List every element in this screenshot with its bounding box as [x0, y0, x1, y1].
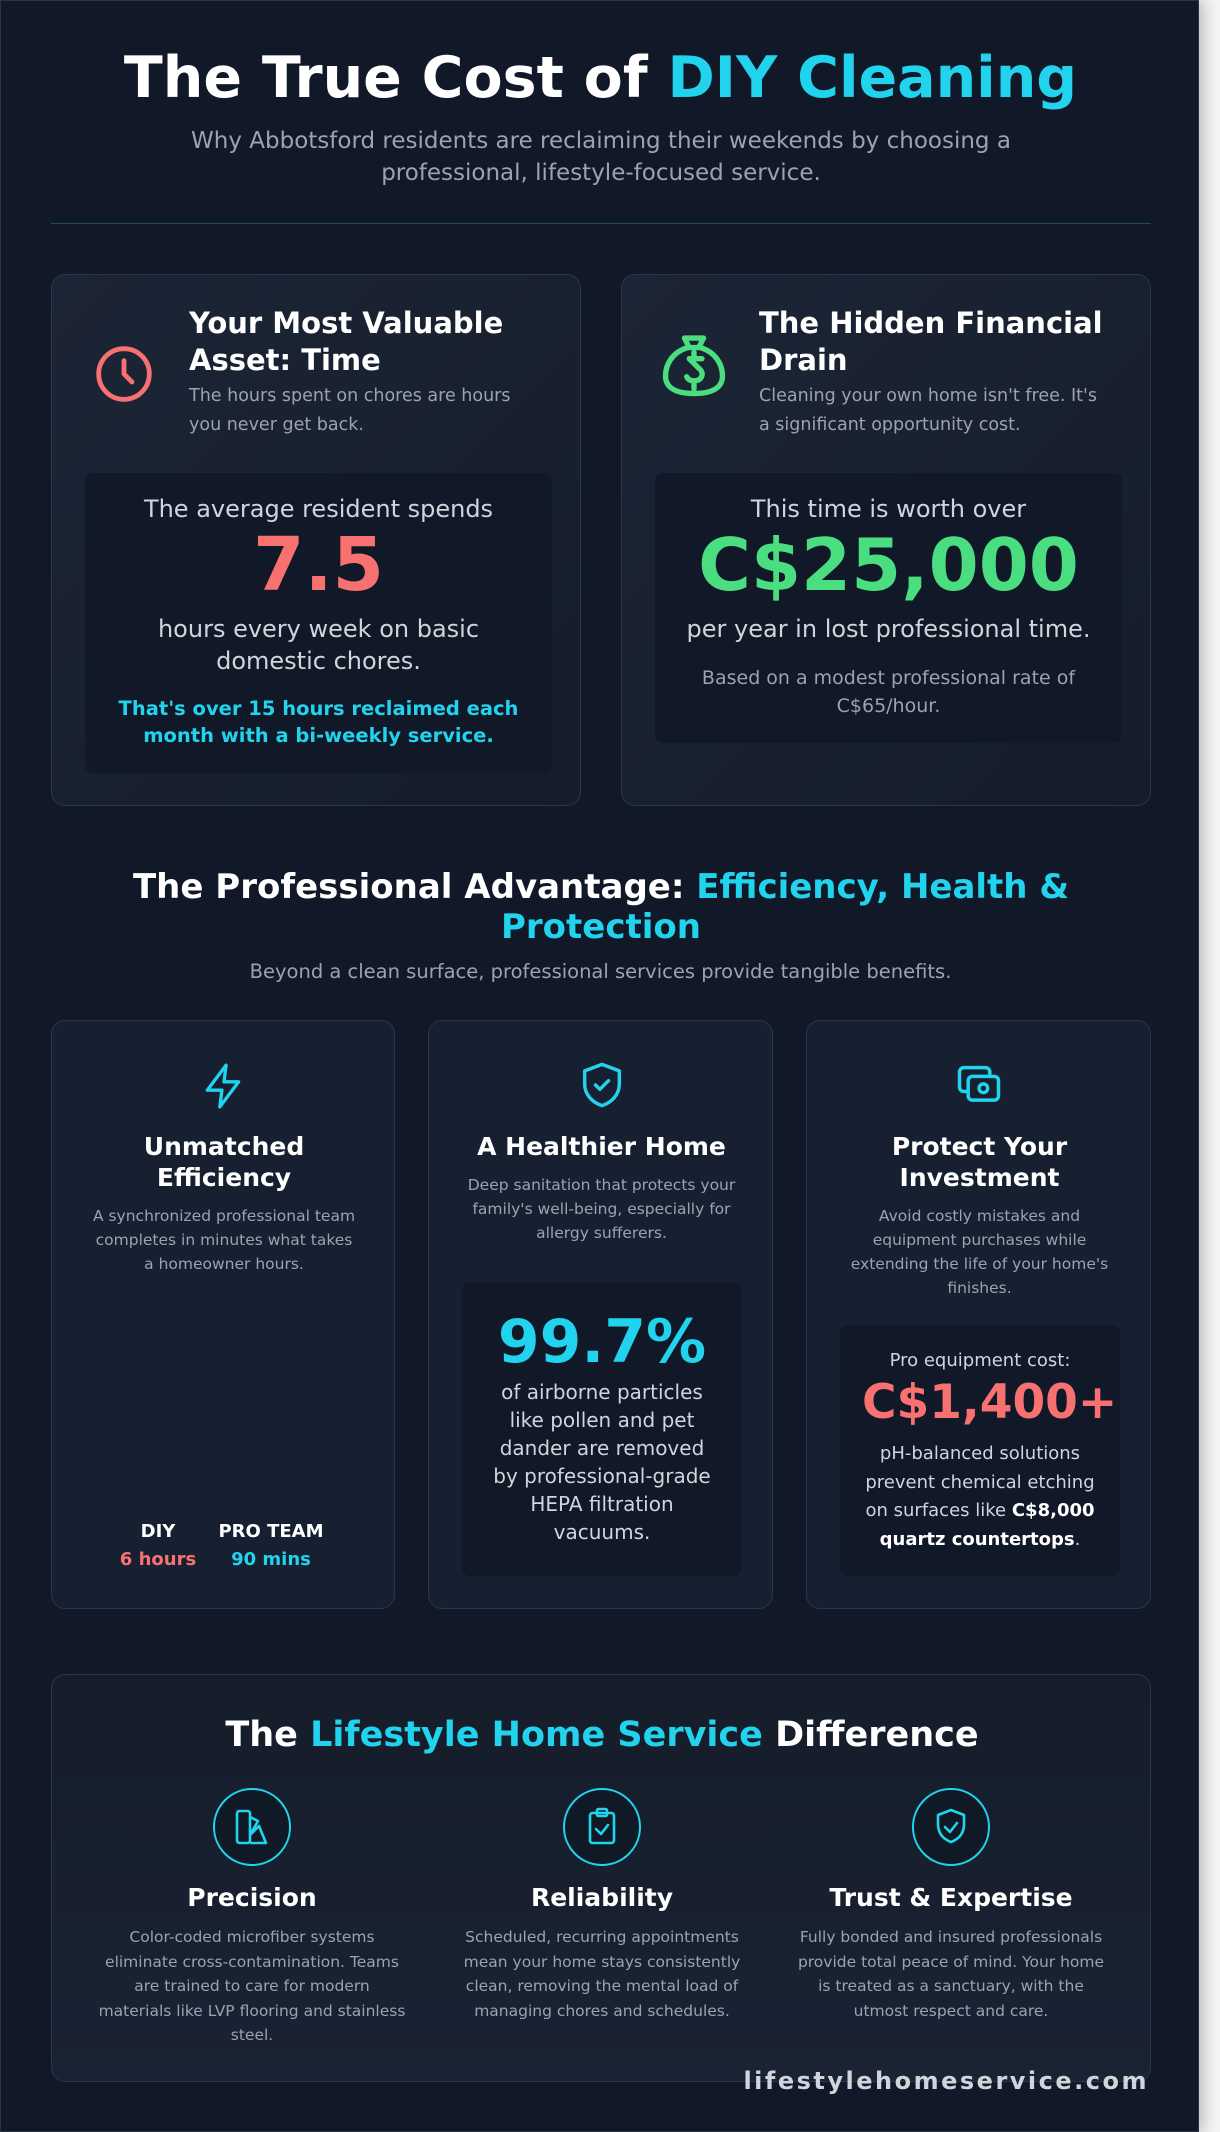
subtitle: advantage: Beyond a clean surface, professional services provide tangible benefits. [250, 960, 951, 983]
stat box: C$25,000: per year in lost professional time. [687, 615, 1090, 643]
icon: clipboard [563, 1788, 641, 1866]
text: efficiency desc: A synchronized professional team completes in minutes what takes a homeowner hours. [93, 1207, 355, 1273]
comparison: DIY vs pro: DIY [141, 1521, 175, 1542]
icon: cash [958, 1066, 1000, 1102]
panel: time [51, 274, 581, 806]
subtitle: Why Abbotsford residents are reclaiming their weekends by choosing a professional, lifestyle-focused service. [191, 128, 1011, 186]
stat box: 99.7%: 99.7% [498, 1307, 706, 1377]
comparison: DIY vs pro: 6 hours [120, 1549, 196, 1570]
heading: precision: Precision [187, 1883, 317, 1912]
stat box: 7.5 hours: 7.5 [253, 522, 384, 608]
footer: website: lifestylehomeservice.com [743, 2067, 1149, 2095]
panel: financial [621, 274, 1151, 806]
text: financial desc: Cleaning your own home isn't free. It's a significant opportunity cost. [759, 386, 1097, 435]
text: precision desc: Color-coded microfiber systems eliminate cross-contamination. Teams are trained to care for modern materials like LVP flooring and stainless steel. [99, 1928, 405, 2044]
stat box: C$1,400+: C$1,400+ [862, 1375, 1117, 1430]
column: reliability [464, 1788, 740, 2020]
heading: healthier: A Healthier Home [477, 1132, 726, 1161]
stat box: C$25,000: C$25,000 [698, 523, 1079, 607]
heading: protect: Protect Your Investment [892, 1132, 1067, 1192]
heading: trust: Trust & Expertise [829, 1883, 1073, 1912]
stat box: C$25,000: This time is worth over [751, 495, 1026, 523]
icon: clock [96, 346, 152, 402]
heading: difference: The Lifestyle Home Service Difference [225, 1715, 979, 1755]
heading: professional advantage: The Professional Advantage: Efficiency, Health & Protection [133, 867, 1069, 947]
stat box: C$1,400+: Pro equipment cost: [890, 1350, 1070, 1371]
stat box: 7.5 hours: That's over 15 hours reclaimed each month with a bi-weekly service. [119, 697, 518, 747]
comparison: DIY vs pro: 90 mins [231, 1549, 311, 1570]
heading: time: Your Most Valuable Asset: Time [189, 306, 503, 377]
stat box: 99.7% [462, 1282, 742, 1576]
column: precision [99, 1788, 405, 2044]
text: reliability desc: Scheduled, recurring appointments mean your home stays consistently clean, removing the mental load of managing chores and schedules. [464, 1928, 740, 2020]
panel: healthier home [428, 1020, 773, 1609]
stat box: C$1,400+ [840, 1325, 1120, 1576]
icon: lightning [206, 1064, 240, 1108]
stat box: 99.7%: of airborne particles like pollen and pet dander are removed by professional-grade HEPA filtration vacuums. [493, 1380, 711, 1544]
stat box: 7.5 hours: The average resident spends [144, 495, 493, 523]
stat box: C$25,000 [655, 473, 1122, 743]
stat box: C$1,400+: pH-balanced solutions prevent chemical etching on surfaces like C$8,000 quartz countertops. [865, 1443, 1095, 1550]
icon: money bag [662, 335, 726, 396]
text: healthier desc: Deep sanitation that protects your family's well-being, especially for allergy sufferers. [468, 1176, 735, 1242]
text: time desc: The hours spent on chores are hours you never get back. [189, 386, 510, 435]
stat box: C$25,000: Based on a modest professional rate of C$65/hour. [702, 667, 1075, 717]
column: trust [798, 1788, 1104, 2020]
text: protect desc: Avoid costly mistakes and equipment purchases while extending the life of your home's finishes. [851, 1207, 1108, 1297]
stat box: 7.5 hours: hours every week on basic domestic chores. [158, 615, 479, 675]
panel: efficiency [51, 1020, 395, 1609]
comparison: DIY vs pro: PRO TEAM [218, 1521, 324, 1542]
panel: protect investment [806, 1020, 1151, 1609]
panel: lifestyle difference [51, 1674, 1151, 2082]
text: trust desc: Fully bonded and insured professionals provide total peace of mind. Your home is treated as a sanctuary, with the utmost respect and care. [798, 1928, 1104, 2020]
heading: financial: The Hidden Financial Drain [759, 306, 1103, 377]
comparison: DIY vs pro [120, 1521, 324, 1570]
icon: shield [912, 1788, 990, 1866]
title: The True Cost of DIY Cleaning [124, 45, 1077, 111]
heading: efficiency: Unmatched Efficiency [144, 1132, 304, 1192]
icon: swatch [213, 1788, 291, 1866]
heading: reliability: Reliability [531, 1883, 673, 1912]
icon: shield check [582, 1062, 622, 1108]
stat box: 7.5 hours [85, 473, 552, 773]
